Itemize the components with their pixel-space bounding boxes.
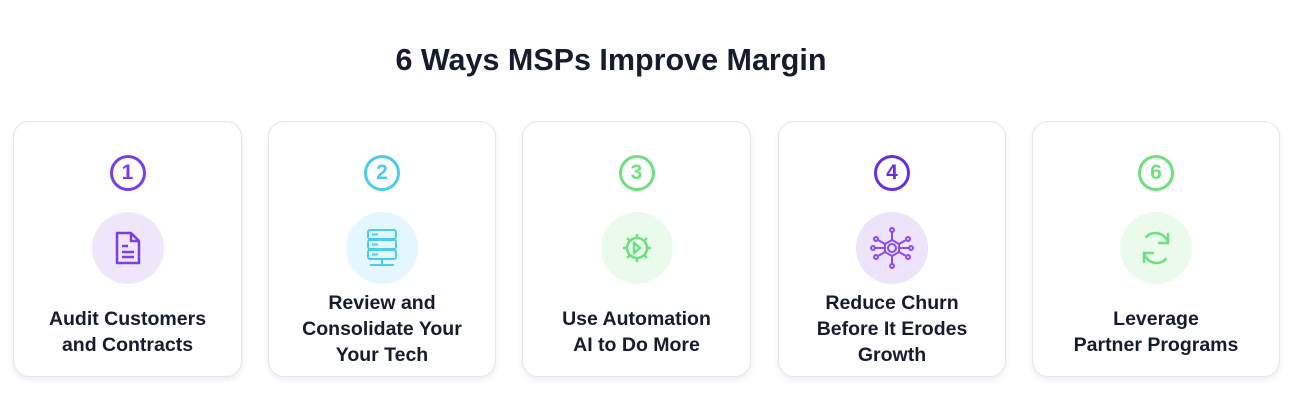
panel: card 4 [778,121,1006,377]
icon: document [92,212,164,284]
text: card 5: Leverage [1113,308,1199,330]
text: card 1: Audit Customers [49,308,206,330]
text: card 1 [49,308,206,356]
number badge 2: 2 [376,161,388,184]
icon: network [856,212,928,284]
text: card 5 [1074,308,1238,356]
number badge 4: 4 [886,161,898,184]
title: 6 Ways MSPs Improve Margin [395,43,827,77]
icon: refresh [1120,212,1192,284]
text: card 3: Use Automation [562,308,711,330]
text: card 4: Growth [858,344,926,366]
icon: gear [600,212,672,284]
text: card 3: AI to Do More [573,334,700,356]
number badge 6: 6 [1150,161,1162,184]
panel: card 2 [268,121,496,377]
icon: server [346,212,418,284]
number badge 3 [618,155,654,191]
number badge 3: 3 [631,161,642,184]
number badge 2 [364,155,400,191]
text: card 3 [562,308,711,356]
number badge 1: 1 [122,161,133,184]
text: card 2: Your Tech [336,344,428,366]
text: card 2: Consolidate Your [302,318,462,340]
panel: card 5 [1032,121,1280,377]
panel: card 3 [522,121,751,377]
text: card 4: Before It Erodes [817,318,967,340]
text: card 2 [302,292,462,366]
number badge 6 [1138,155,1174,191]
text: card 4 [817,292,967,366]
text: card 5: Partner Programs [1074,334,1238,356]
panel: card 1 [13,121,242,377]
number badge 1 [110,155,146,191]
number badge 4 [874,155,910,191]
text: card 4: Reduce Churn [825,292,959,314]
text: card 1: and Contracts [62,334,193,356]
text: card 2: Review and [328,292,436,314]
